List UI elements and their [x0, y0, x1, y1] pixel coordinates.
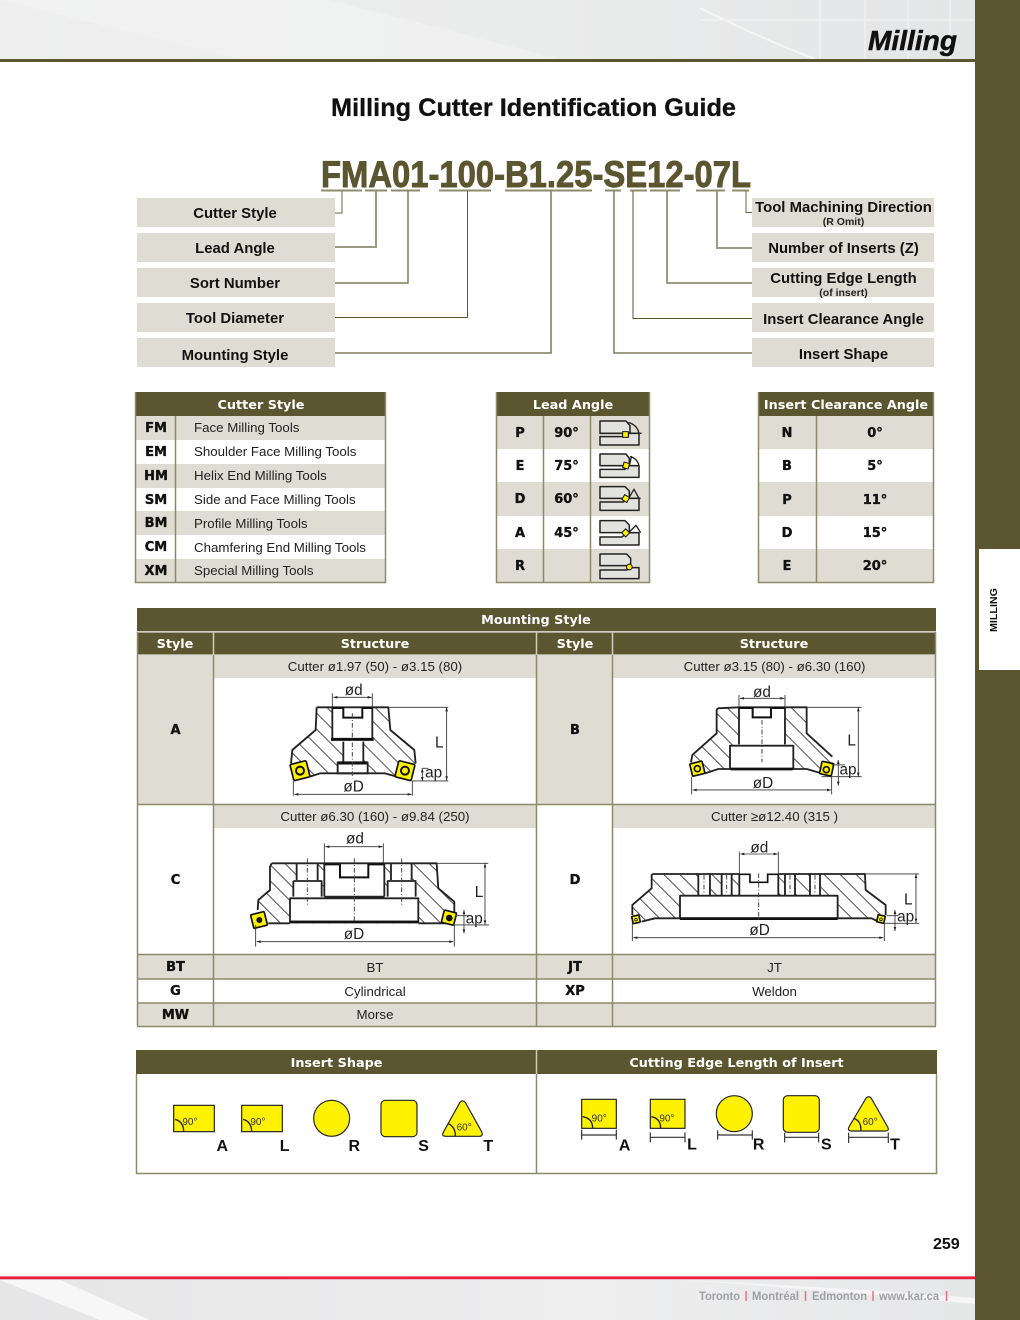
table: Cutter Style: Cutter Style: [218, 398, 305, 413]
icon: lead angles: [600, 421, 642, 579]
table: Cutter Style: Profile Milling Tools: [194, 516, 308, 531]
length T: T: [890, 1137, 900, 1154]
table: Insert Clearance Angle: 15°: [863, 526, 887, 541]
diagram: style B cutter: ap: [839, 761, 857, 778]
table header: Style: [157, 637, 194, 652]
table grid: [137, 632, 936, 1026]
diagram: style A cutter: [290, 682, 448, 796]
table: Insert Clearance Angle: N: [782, 426, 792, 441]
length L: [650, 1099, 697, 1154]
length R: R: [753, 1137, 765, 1154]
diagram: style B cutter: ød: [753, 684, 771, 701]
table: Mounting Style: G: [170, 984, 181, 999]
label: Tool Machining Direction: [752, 198, 934, 228]
table: Mounting Style: BT: [366, 960, 384, 975]
label: Mounting Style: [137, 338, 335, 367]
page footer band: [0, 1278, 975, 1320]
diagram: style D cutter: ap: [897, 909, 914, 926]
shape A: A: [217, 1138, 229, 1155]
table: Mounting Style: Morse: [357, 1007, 393, 1022]
table: Cutter Style: Face Milling Tools: [194, 420, 300, 435]
label: Lead Angle: [137, 233, 335, 262]
table: Lead Angle: D: [515, 492, 526, 507]
table: Mounting Style: B: [570, 723, 580, 738]
table: Cutter Style: CM: [145, 540, 167, 555]
diagram: style C cutter: L: [475, 884, 484, 901]
label: Insert Clearance Angle: Insert Clearance Angle: [763, 312, 924, 328]
table: Insert Clearance Angle: [758, 392, 934, 582]
label: Mounting Style: Mounting Style: [182, 348, 288, 364]
shape S: S: [418, 1138, 429, 1155]
main heading: Milling Cutter Identification Guide: [331, 94, 736, 122]
sidebar tab: MILLING: MILLING: [988, 588, 1000, 632]
table: Lead Angle: E: [516, 459, 524, 474]
length R: [716, 1096, 765, 1154]
page number: 259: [933, 1236, 960, 1253]
table: Mounting Style: JT: [767, 960, 782, 975]
table: Cutter Style: FM: [145, 421, 167, 436]
shape S: [381, 1100, 429, 1155]
table: Cutter Style: Special Milling Tools: [194, 563, 314, 578]
table: Lead Angle: 60°: [554, 492, 579, 507]
table header: Structure: [740, 637, 809, 652]
diagram: style C cutter: øD: [344, 926, 364, 943]
table: Cutter Style: [135, 392, 386, 582]
table: Insert Clearance Angle: 5°: [867, 459, 883, 474]
table: Insert Clearance Angle: 0°: [867, 426, 883, 441]
icon: round: [600, 554, 639, 579]
label: Number of Inserts: Number of Inserts (Z): [768, 241, 919, 257]
left labels panel: [137, 198, 335, 367]
length S: S: [821, 1137, 832, 1154]
table: Mounting Style: MW: [162, 1008, 189, 1023]
icon: 60 degree: [600, 487, 641, 510]
table: Mounting Style: JT: [567, 960, 582, 975]
shape A: 90°: [182, 1117, 197, 1128]
diagram: style A cutter: øD: [343, 778, 364, 795]
shape A: [174, 1105, 229, 1155]
table: Insert Clearance Angle: B: [782, 459, 792, 474]
table: Insert Clearance Angle: D: [782, 526, 793, 541]
diagram: style D cutter: ød: [750, 839, 768, 856]
table: Mounting Style: A: [170, 723, 181, 738]
length S: [783, 1096, 832, 1154]
diagram: style B cutter: øD: [753, 775, 773, 792]
table shaded cells: [137, 655, 936, 1026]
footer locations: Montréal: [752, 1291, 799, 1303]
table: Cutter Style: Shoulder Face Milling Tools: [194, 444, 357, 459]
diagram: style B cutter: L: [847, 733, 856, 750]
shape T: [443, 1101, 493, 1155]
model code with underlines: FMA01-100-B1.25-SE12-07L: [321, 154, 751, 195]
length A: A: [619, 1137, 631, 1154]
label: Cutter Style: [137, 198, 335, 227]
table: Cutter Style: SM: [145, 493, 167, 508]
table: Mounting Style: Cylindrical: [344, 984, 406, 999]
footer locations: Edmonton: [812, 1291, 867, 1303]
diagram: style C cutter: [251, 831, 489, 947]
table: Lead Angle: P: [515, 426, 525, 441]
table: Cutter Style: HM: [144, 469, 168, 484]
shape T: 60°: [457, 1122, 472, 1133]
connector lines: [335, 191, 752, 353]
shape T: T: [483, 1138, 493, 1155]
length T: 60°: [863, 1117, 878, 1128]
label: Insert Clearance Angle: [752, 303, 934, 332]
length T: [848, 1097, 900, 1154]
table: Cutter Style: XM: [145, 564, 167, 579]
table: Mounting Style: Cutter ø1.97 (50) - ø3.15 (80): [288, 659, 462, 674]
shape R: [314, 1100, 361, 1155]
table: Cutter Style: Side and Face Milling Tools: [194, 492, 356, 507]
table: Cutter Style: Helix End Milling Tools: [194, 468, 327, 483]
table: Insert Clearance Angle: E: [783, 559, 791, 574]
table: Mounting Style: D: [570, 873, 581, 888]
table: Cutter Style: Chamfering End Milling Tools: [194, 540, 366, 555]
diagram: style A cutter: ød: [345, 682, 363, 699]
label: Cutting Edge Length: (of insert): [819, 287, 868, 299]
table: Lead Angle: Lead Angle: [533, 398, 613, 413]
footer locations: Toronto: [699, 1291, 740, 1303]
table header: Structure: [341, 637, 410, 652]
label: Tool Machining Direction: (R Omit): [823, 216, 864, 228]
label: Tool Diameter: [137, 303, 335, 332]
section title: Milling: Milling: [868, 25, 957, 56]
table: Insert Shape and Cutting Edge Length: Insert Shape: [291, 1056, 383, 1071]
diagram: style C cutter: ap: [466, 911, 483, 928]
label: Insert Shape: [752, 338, 934, 367]
right labels panel: [752, 198, 934, 367]
table: Insert Clearance Angle: 20°: [863, 559, 887, 574]
table: Insert Clearance Angle: P: [782, 493, 792, 508]
table: Lead Angle: R: [515, 559, 525, 574]
table: Insert Clearance Angle: Insert Clearance Angle: [764, 398, 928, 413]
shape L: [242, 1105, 290, 1155]
table: Insert Clearance Angle: 11°: [863, 493, 887, 508]
footer locations: [699, 1291, 946, 1303]
icon: 75 degree: [600, 454, 639, 477]
sidebar tab: MILLING: [979, 549, 1020, 670]
table: Lead Angle: 45°: [554, 526, 579, 541]
length L: 90°: [659, 1114, 674, 1125]
label: Cutting Edge Length: Cutting Edge Length: [770, 271, 917, 287]
label: Tool Machining Direction: Tool Machining Direction: [755, 200, 932, 216]
length A: 90°: [592, 1114, 607, 1125]
table: Cutter Style: EM: [145, 445, 167, 460]
length L: L: [687, 1137, 697, 1154]
table header: Style: [557, 637, 594, 652]
olive sidebar: [975, 0, 1020, 1320]
label: Sort Number: [137, 268, 335, 297]
label: Tool Diameter: Tool Diameter: [186, 311, 284, 327]
table: Mounting Style: Weldon: [752, 984, 797, 999]
insert shapes: [174, 1100, 493, 1155]
table: Lead Angle: A: [515, 526, 525, 541]
table: Lead Angle: 90°: [554, 426, 579, 441]
diagram: style B cutter: [690, 684, 862, 794]
cutting edge lengths: [582, 1096, 900, 1154]
shape L: 90°: [250, 1117, 265, 1128]
table: Mounting Style: Cutter ≥ø12.40 (315 ): [711, 809, 838, 824]
diagram: style D cutter: øD: [749, 922, 770, 939]
label: Cutting Edge Length: [752, 268, 934, 299]
diagram: style A cutter: L: [435, 735, 444, 752]
table header: [137, 608, 936, 655]
label: Number of Inserts: [752, 233, 934, 262]
table: Insert Shape and Cutting Edge Length: Cutting Edge Length of Insert: [629, 1056, 844, 1071]
label: Insert Shape: Insert Shape: [799, 347, 888, 363]
table: Mounting Style: C: [171, 873, 180, 888]
icon: 45 degree: [600, 521, 641, 545]
table header: Mounting Style: [481, 613, 591, 628]
table: Lead Angle: [496, 392, 650, 582]
diagram: style C cutter: ød: [346, 831, 364, 848]
footer locations: www.kar.ca: [878, 1291, 940, 1303]
table: Mounting Style: XP: [565, 984, 585, 999]
table: Cutter Style: BM: [145, 516, 167, 531]
page header band: [0, 0, 975, 62]
icon: 90 degree: [600, 421, 642, 445]
table: Mounting Style: [137, 608, 936, 1026]
diagram: style A cutter: ap: [425, 765, 442, 782]
label: Cutter Style: Cutter Style: [193, 206, 277, 222]
label: Lead Angle: Lead Angle: [195, 241, 275, 257]
table: Insert Shape and Cutting Edge Length: [136, 1050, 937, 1174]
table: Mounting Style: Cutter ø3.15 (80) - ø6.30 (160): [684, 659, 865, 674]
table: Mounting Style: BT: [166, 960, 185, 975]
shape R: R: [349, 1138, 361, 1155]
diagram: style D cutter: [632, 839, 919, 941]
shape L: L: [280, 1138, 290, 1155]
length A: [582, 1099, 631, 1154]
table: Mounting Style: Cutter ø6.30 (160) - ø9.84 (250): [280, 809, 470, 824]
diagram: style D cutter: L: [904, 891, 913, 908]
table: Lead Angle: 75°: [554, 459, 579, 474]
label: Sort Number: Sort Number: [190, 276, 280, 292]
